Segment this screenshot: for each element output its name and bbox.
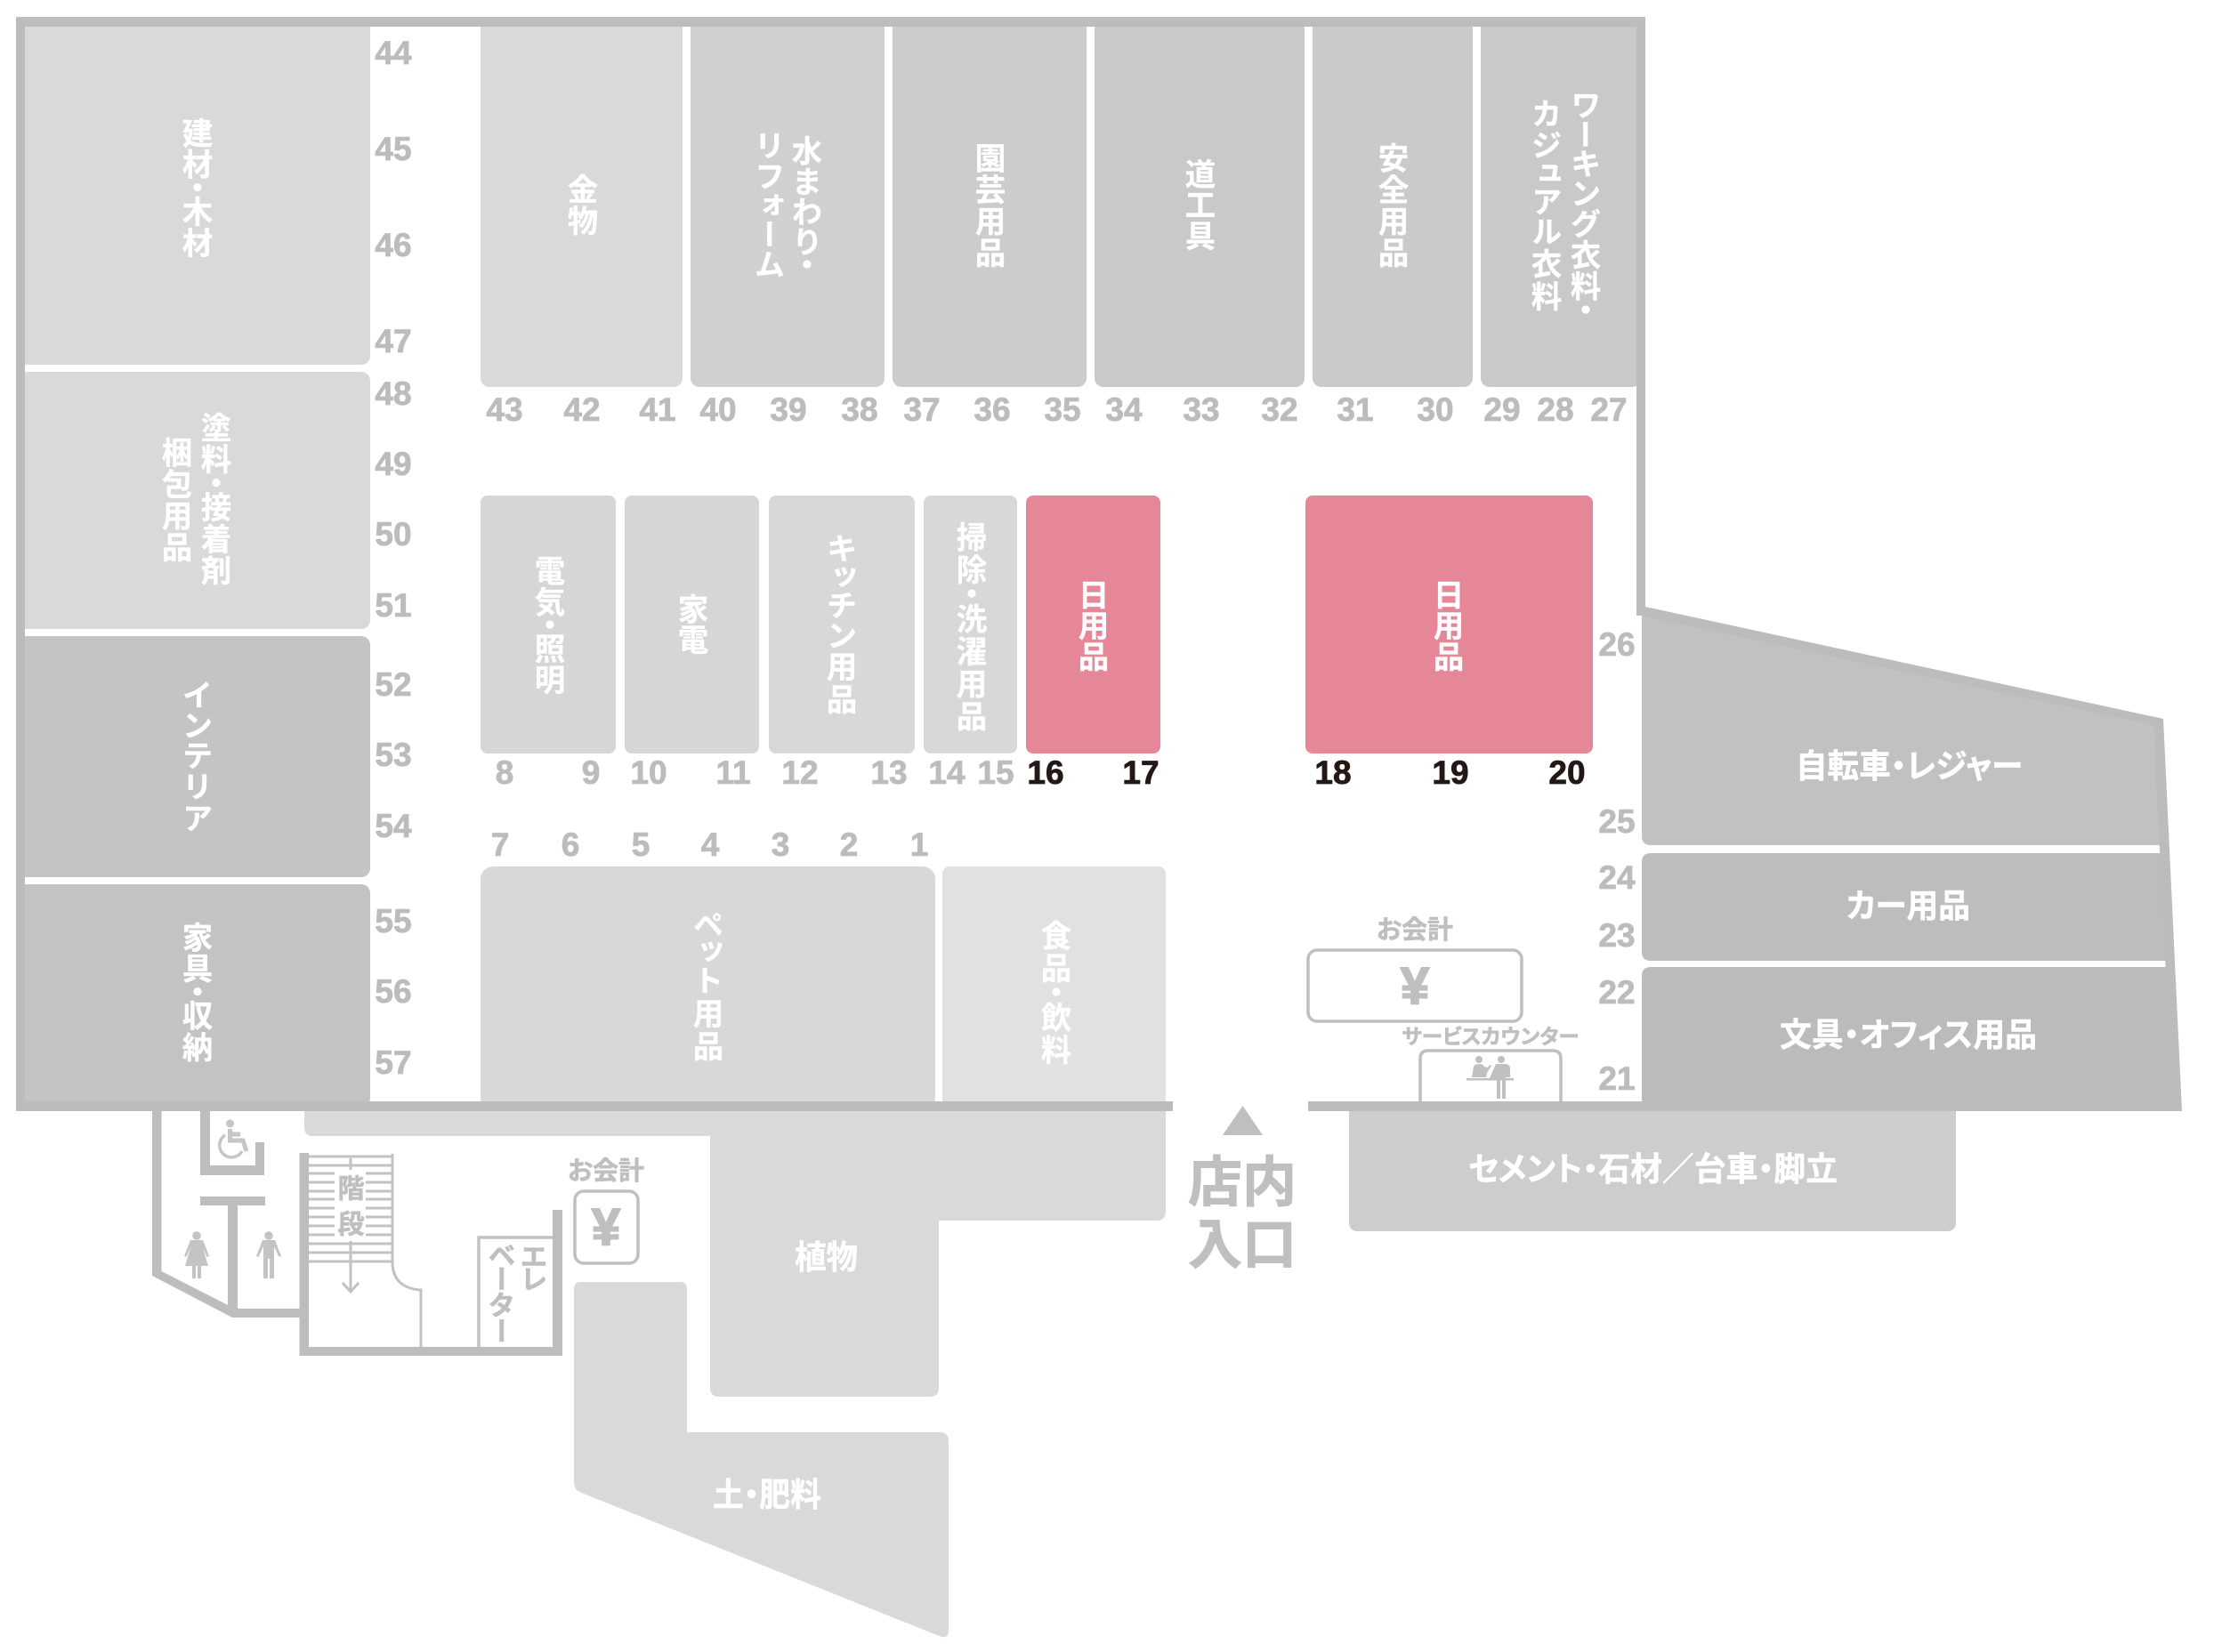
label: 金物: 金物 bbox=[562, 173, 598, 236]
aisle numbers: middle row 8-15: 8 bbox=[496, 754, 513, 791]
entrance label: 店内 bbox=[1188, 1152, 1297, 1213]
label: 文具・オフィス用品: 文具・オフィス用品 bbox=[1780, 1017, 2037, 1053]
aisle numbers: lower row 7-1: 1 bbox=[910, 826, 928, 863]
aisle numbers: top row 43-27: 34 bbox=[1105, 391, 1143, 428]
aisle numbers: lower row 7-1: 3 bbox=[772, 826, 789, 863]
aisle numbers: lower row 7-1: 6 bbox=[562, 826, 579, 863]
icon: wheelchair bbox=[220, 1119, 246, 1157]
aisle numbers: top row 43-27: 36 bbox=[974, 391, 1011, 428]
aisle numbers: top row 43-27 bbox=[486, 391, 1628, 428]
outer store wall bbox=[16, 17, 2182, 1111]
aisle numbers: middle row 8-15 bbox=[496, 754, 1014, 791]
aisle numbers: top row 43-27: 40 bbox=[699, 391, 737, 428]
aisle numbers: highlighted 16-20: 19 bbox=[1432, 754, 1469, 791]
label: 梱包用品: 梱包用品 bbox=[157, 437, 192, 562]
zone: 自転車・レジャー bbox=[1642, 612, 2168, 845]
aisle numbers: right column 26-21: 21 bbox=[1598, 1060, 1636, 1097]
label: カジュアル衣料: カジュアル衣料 bbox=[1526, 99, 1562, 311]
label: ペット用品: ペット用品 bbox=[688, 912, 723, 1061]
aisle numbers: top row 43-27: 29 bbox=[1483, 391, 1521, 428]
label: 塗料・接着剤: 塗料・接着剤 bbox=[196, 412, 231, 585]
aisle numbers: right column 26-21: 26 bbox=[1598, 626, 1636, 663]
checkout (lower): label: お会計 bbox=[568, 1156, 644, 1186]
aisle numbers: left column 44-57: 55 bbox=[375, 903, 412, 939]
aisle numbers: lower row 7-1: 4 bbox=[701, 826, 720, 863]
aisle numbers: top row 43-27: 41 bbox=[639, 391, 676, 428]
aisle numbers: right column 26-21: 24 bbox=[1598, 859, 1636, 896]
aisle numbers: top row 43-27: 30 bbox=[1417, 391, 1454, 428]
label: リフォーム: リフォーム bbox=[749, 131, 783, 279]
entrance label: 入口 bbox=[1188, 1214, 1297, 1275]
aisle numbers: top row 43-27: 28 bbox=[1537, 391, 1574, 428]
aisle numbers: left column 44-57: 44 bbox=[375, 35, 412, 71]
label: カー用品: カー用品 bbox=[1846, 888, 1970, 924]
aisle numbers: top row 43-27: 37 bbox=[903, 391, 941, 428]
aisle numbers: right column 26-21: 23 bbox=[1598, 917, 1636, 954]
label: 日用品 (small): 日用品 bbox=[1073, 579, 1109, 672]
zone: 家具・収納 bbox=[18, 884, 370, 1107]
aisle numbers: left column 44-57: 51 bbox=[375, 587, 412, 624]
aisle numbers: right column 26-21 bbox=[1598, 626, 1636, 1097]
zone: 電気・照明 bbox=[481, 496, 616, 753]
label: 階段: 階段 bbox=[333, 1174, 365, 1245]
aisle numbers: top row 43-27: 38 bbox=[841, 391, 878, 428]
label: 自転車・レジャー: 自転車・レジャー bbox=[1796, 748, 2023, 785]
zone: 園芸用品 bbox=[893, 18, 1087, 387]
aisle numbers: lower row 7-1: 7 bbox=[491, 826, 509, 863]
aisle numbers: top row 43-27: 31 bbox=[1337, 391, 1374, 428]
aisle numbers: right column 26-21: 22 bbox=[1598, 974, 1636, 1011]
zone: ワーキング衣料 bbox=[1481, 18, 1641, 387]
aisle numbers: left column 44-57: 53 bbox=[375, 737, 412, 773]
zone: セメント・石材／台車・脚立 bbox=[1349, 1107, 1956, 1231]
aisle numbers: left column 44-57: 57 bbox=[375, 1044, 412, 1081]
zone: 安全用品 bbox=[1313, 18, 1473, 387]
stairs bbox=[309, 1154, 421, 1347]
label: 電気・照明: 電気・照明 bbox=[529, 555, 565, 695]
label: 土・肥料: 土・肥料 bbox=[713, 1477, 821, 1513]
checkout (lower): counter box bbox=[575, 1191, 638, 1263]
icon: men's restroom bbox=[256, 1231, 281, 1278]
label: エレ: エレ bbox=[516, 1244, 546, 1292]
aisle numbers: top row 43-27: 42 bbox=[563, 391, 601, 428]
aisle numbers: left column 44-57: 46 bbox=[375, 227, 412, 263]
zone: 建材・木材 bbox=[18, 18, 370, 365]
aisle numbers: left column 44-57: 52 bbox=[375, 666, 412, 703]
aisle numbers: left column 44-57: 48 bbox=[375, 375, 412, 412]
aisle numbers: lower row 7-1 bbox=[491, 826, 928, 863]
aisle numbers: middle row 8-15: 13 bbox=[870, 754, 908, 791]
vertical zone labels bbox=[157, 91, 1601, 1065]
aisle numbers: middle row 8-15: 9 bbox=[582, 754, 600, 791]
aisle numbers: left column 44-57: 45 bbox=[375, 131, 412, 167]
icon: service counter staff bbox=[1467, 1056, 1514, 1099]
aisle numbers: left column 44-57: 50 bbox=[375, 516, 412, 552]
label: 食品・飲料: 食品・飲料 bbox=[1036, 920, 1071, 1065]
zone: キッチン用品 bbox=[769, 496, 915, 753]
zone: カー用品 bbox=[1642, 853, 2172, 961]
aisle numbers: top row 43-27: 39 bbox=[770, 391, 807, 428]
elevator bbox=[479, 1237, 553, 1347]
zone: 土・肥料 bbox=[574, 1282, 949, 1637]
label: ワーキング衣料・: ワーキング衣料・ bbox=[1565, 91, 1601, 318]
zone: 植物 bbox=[304, 1107, 1166, 1397]
service counter: label: サービスカウンター bbox=[1402, 1025, 1579, 1048]
aisle numbers: lower row 7-1: 2 bbox=[840, 826, 858, 863]
zone: 家電 bbox=[625, 496, 759, 753]
aisle numbers: top row 43-27: 33 bbox=[1183, 391, 1220, 428]
aisle numbers: middle row 8-15: 12 bbox=[781, 754, 819, 791]
aisle numbers: right column 26-21: 25 bbox=[1598, 803, 1636, 840]
aisle numbers: middle row 8-15: 15 bbox=[977, 754, 1014, 791]
aisle numbers: left column 44-57: 56 bbox=[375, 973, 412, 1010]
checkout (lower): counter box: ¥ bbox=[592, 1198, 620, 1256]
zone: 食品・飲料 bbox=[942, 866, 1166, 1110]
aisle numbers: left column 44-57: 47 bbox=[375, 323, 412, 359]
label: キッチン用品: キッチン用品 bbox=[821, 534, 857, 714]
label: 家電: 家電 bbox=[673, 593, 707, 655]
aisle numbers: top row 43-27: 32 bbox=[1261, 391, 1298, 428]
label: 安全用品: 安全用品 bbox=[1373, 142, 1409, 268]
checkout (upper): label: お会計 bbox=[1377, 915, 1453, 945]
zone: 金物 bbox=[481, 18, 683, 387]
label: 日用品 (large): 日用品 bbox=[1428, 579, 1464, 672]
aisle numbers: left column 44-57: 54 bbox=[375, 808, 412, 844]
checkout (upper): counter box: ¥ bbox=[1401, 957, 1429, 1015]
label: ベーター: ベーター bbox=[484, 1244, 514, 1343]
zone: 文具・オフィス用品 bbox=[1642, 967, 2178, 1107]
aisle numbers: middle row 8-15: 10 bbox=[630, 754, 667, 791]
restroom and stair walls bbox=[152, 1111, 562, 1356]
zone: 日用品 (small) bbox=[1026, 496, 1160, 753]
aisle numbers: middle row 8-15: 11 bbox=[715, 754, 751, 791]
label: 道工具: 道工具 bbox=[1180, 158, 1216, 251]
entrance arrow bbox=[1223, 1106, 1263, 1135]
zone: 道工具 bbox=[1095, 18, 1305, 387]
label: 掃除・洗濯用品: 掃除・洗濯用品 bbox=[951, 521, 987, 731]
label: セメント・石材／台車・脚立: セメント・石材／台車・脚立 bbox=[1468, 1151, 1838, 1188]
zone: 水まわり・リフォーム bbox=[691, 18, 885, 387]
aisle numbers: lower row 7-1: 5 bbox=[632, 826, 650, 863]
icon: women's restroom bbox=[184, 1231, 209, 1278]
aisle numbers: highlighted 16-20: 16 bbox=[1027, 754, 1064, 791]
zone: ペット用品 bbox=[481, 866, 935, 1110]
horizontal zone labels bbox=[713, 748, 2037, 1513]
entrance label bbox=[1188, 1152, 1297, 1275]
aisle numbers: top row 43-27: 35 bbox=[1044, 391, 1081, 428]
aisle numbers: left column 44-57 bbox=[375, 35, 412, 1081]
label: インテリア: インテリア bbox=[177, 681, 211, 832]
label: 植物: 植物 bbox=[795, 1239, 858, 1276]
service counter: box bbox=[1420, 1051, 1561, 1101]
checkout (upper): counter box bbox=[1308, 950, 1522, 1021]
aisle numbers: highlighted 16-20 bbox=[1027, 754, 1586, 791]
zone: 掃除・洗濯用品 bbox=[924, 496, 1017, 753]
aisle numbers: middle row 8-15: 14 bbox=[928, 754, 966, 791]
label: 園芸用品: 園芸用品 bbox=[970, 142, 1006, 268]
aisle numbers: top row 43-27: 43 bbox=[486, 391, 523, 428]
aisle numbers: highlighted 16-20: 17 bbox=[1122, 754, 1159, 791]
zone: 日用品 (large) bbox=[1305, 496, 1593, 753]
aisle numbers: highlighted 16-20: 20 bbox=[1548, 754, 1586, 791]
zone: インテリア bbox=[18, 636, 370, 877]
label: 家具・収納: 家具・収納 bbox=[177, 922, 213, 1062]
aisle numbers: highlighted 16-20: 18 bbox=[1314, 754, 1352, 791]
label: 建材・木材: 建材・木材 bbox=[177, 117, 213, 258]
aisle numbers: left column 44-57: 49 bbox=[375, 446, 412, 482]
aisle numbers: top row 43-27: 27 bbox=[1590, 391, 1628, 428]
zone: 塗料・接着剤 梱包用品 bbox=[18, 372, 370, 629]
label: 水まわり・: 水まわり・ bbox=[787, 135, 822, 272]
